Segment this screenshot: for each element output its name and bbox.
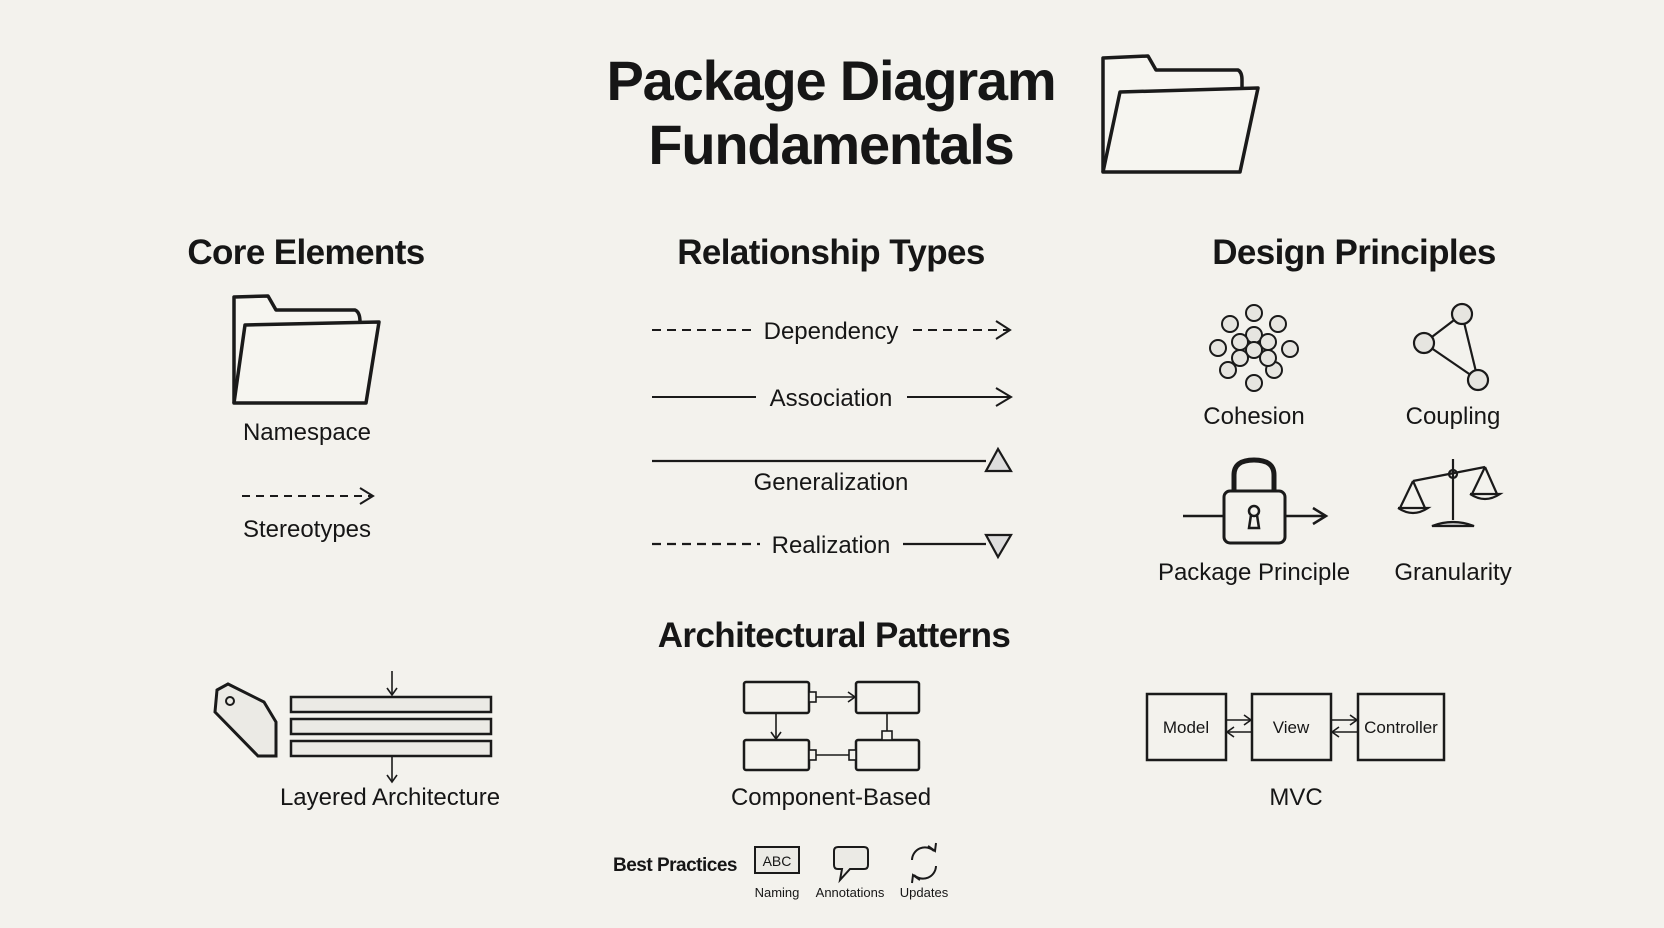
icon: ABC — [755, 847, 799, 873]
icon: cohesion — [1210, 305, 1298, 391]
heading: Relationship Types: Relationship Types — [677, 233, 985, 272]
row: generalization: Generalization — [754, 469, 908, 496]
icon: layers — [291, 671, 491, 782]
row: dependency: Dependency — [764, 318, 898, 345]
panel: best practices — [613, 843, 949, 900]
label: Component-Based: Component-Based — [731, 784, 931, 811]
row: dependency — [652, 318, 1010, 345]
icon: ABC: ABC — [763, 853, 791, 869]
panel: best practices: Updates — [900, 885, 949, 900]
title: Fundamentals — [648, 113, 1014, 176]
row: realization: Realization — [772, 532, 890, 559]
panel: layered architecture — [215, 671, 500, 811]
row: association — [652, 385, 1011, 412]
label: Coupling: Coupling — [1406, 403, 1500, 430]
panel: core elements — [234, 296, 379, 543]
title — [607, 49, 1055, 176]
heading: Core Elements: Core Elements — [187, 233, 425, 272]
label: Layered Architecture: Layered Architecture — [280, 784, 500, 811]
panel: MVC: Controller — [1364, 718, 1438, 737]
panel: relationship types — [652, 318, 1011, 559]
icon: title folder — [1103, 56, 1258, 172]
label: Stereotypes: Stereotypes — [243, 516, 371, 543]
panel: best practices: Annotations — [816, 885, 885, 900]
title: Package Diagram — [607, 49, 1055, 112]
label: MVC: MVC — [1269, 784, 1323, 811]
panel: MVC: View — [1273, 718, 1310, 737]
heading: Architectural Patterns: Architectural Patterns — [658, 616, 1010, 655]
panel: best practices: Best Practices — [613, 855, 737, 876]
panel: MVC — [1147, 694, 1444, 811]
panel: best practices: Naming — [755, 885, 799, 900]
icon: speech bubble — [834, 847, 868, 880]
panel: MVC: Model — [1163, 718, 1209, 737]
row: association: Association — [770, 385, 892, 412]
heading: Design Principles: Design Principles — [1212, 233, 1496, 272]
icon: scale — [1398, 459, 1500, 526]
icon: tag — [215, 684, 276, 756]
panel: design principles — [1158, 304, 1512, 586]
label: Granularity: Granularity — [1394, 559, 1512, 586]
arrow: stereotypes — [242, 488, 373, 504]
label: Cohesion: Cohesion — [1203, 403, 1305, 430]
label: Namespace: Namespace — [243, 419, 371, 446]
label: Package Principle: Package Principle — [1158, 559, 1350, 586]
panel: component-based — [731, 682, 931, 811]
icon: namespace folder — [234, 296, 379, 403]
icon: coupling — [1414, 304, 1488, 390]
row: generalization — [652, 449, 1011, 496]
row: realization — [652, 532, 1011, 559]
icon: lock with arrow — [1183, 460, 1326, 543]
icon: refresh — [912, 843, 936, 883]
